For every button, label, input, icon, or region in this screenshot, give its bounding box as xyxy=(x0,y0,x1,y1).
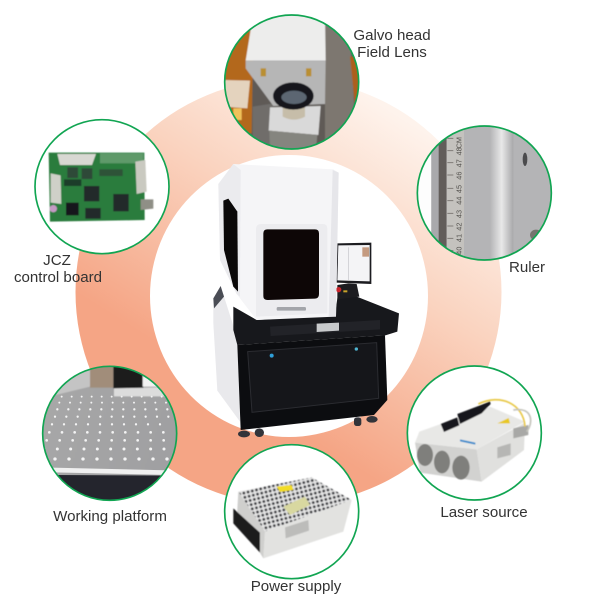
ruler numbers: 47 xyxy=(454,159,463,167)
side viewing window xyxy=(223,199,238,292)
control buttons xyxy=(336,287,347,292)
ruler ticks xyxy=(447,138,453,251)
photo of laser source xyxy=(415,400,531,482)
panel: laser source xyxy=(407,366,541,500)
panel: working platform xyxy=(42,365,178,502)
white enclosure cabinet xyxy=(218,164,339,320)
ruler numbers: 43 xyxy=(454,210,463,218)
ruler numbers: 42 xyxy=(454,223,463,231)
machine table top xyxy=(233,297,399,345)
green circle border xyxy=(407,366,541,500)
ruler numbers: 41 xyxy=(454,234,463,242)
label: control board: control board xyxy=(14,269,102,286)
label: ruler: Ruler xyxy=(509,259,545,276)
table drawer recess xyxy=(270,320,380,336)
green circle border xyxy=(417,126,551,260)
label: laser source: Laser source xyxy=(440,504,528,521)
ruler numbers: 46 xyxy=(454,172,463,180)
panel: galvo head and field lens xyxy=(223,13,360,153)
panel: ruler xyxy=(417,125,553,262)
panel: JCZ control board xyxy=(35,120,169,254)
front viewing window xyxy=(263,229,319,300)
green circle border xyxy=(35,120,169,254)
photo of power supply xyxy=(233,477,352,558)
photo of control board xyxy=(49,153,153,222)
monitor xyxy=(336,243,371,299)
platform hole grid xyxy=(44,397,177,459)
label: galvo head: Galvo head xyxy=(353,27,431,44)
green circle border xyxy=(225,15,359,149)
photo of galvo head xyxy=(223,13,360,153)
label: power supply: Power supply xyxy=(251,578,342,595)
brand plate xyxy=(277,307,306,311)
central laser marking machine xyxy=(213,164,399,437)
ruler numbers: CM xyxy=(454,137,463,148)
ruler numbers: 45 xyxy=(454,185,463,193)
label: JCZ: JCZ xyxy=(43,252,71,269)
cabinet side shade xyxy=(218,164,241,297)
ruler numbers: 44 xyxy=(454,197,463,205)
silver handle plate xyxy=(317,323,339,332)
ruler numbers: 40 xyxy=(454,247,463,255)
casters and feet xyxy=(238,416,378,437)
ruler numbers xyxy=(456,138,462,254)
label: field lens: Field Lens xyxy=(357,44,427,61)
machine left body dark edge xyxy=(213,286,224,308)
base door panel xyxy=(248,343,379,412)
green circle border xyxy=(43,366,177,500)
peach ring background xyxy=(76,79,502,505)
photo of ruler xyxy=(431,126,550,260)
photo of working platform xyxy=(42,365,178,502)
machine base cabinet xyxy=(237,335,387,430)
machine left body panel xyxy=(213,286,240,422)
door indicators xyxy=(270,347,358,358)
green circle border xyxy=(225,445,359,579)
panel: power supply xyxy=(225,445,359,579)
cabinet right edge shade xyxy=(329,170,339,317)
cabinet door frame xyxy=(256,224,327,317)
ruler numbers: 48 xyxy=(454,147,463,155)
label: working platform: Working platform xyxy=(53,508,167,525)
